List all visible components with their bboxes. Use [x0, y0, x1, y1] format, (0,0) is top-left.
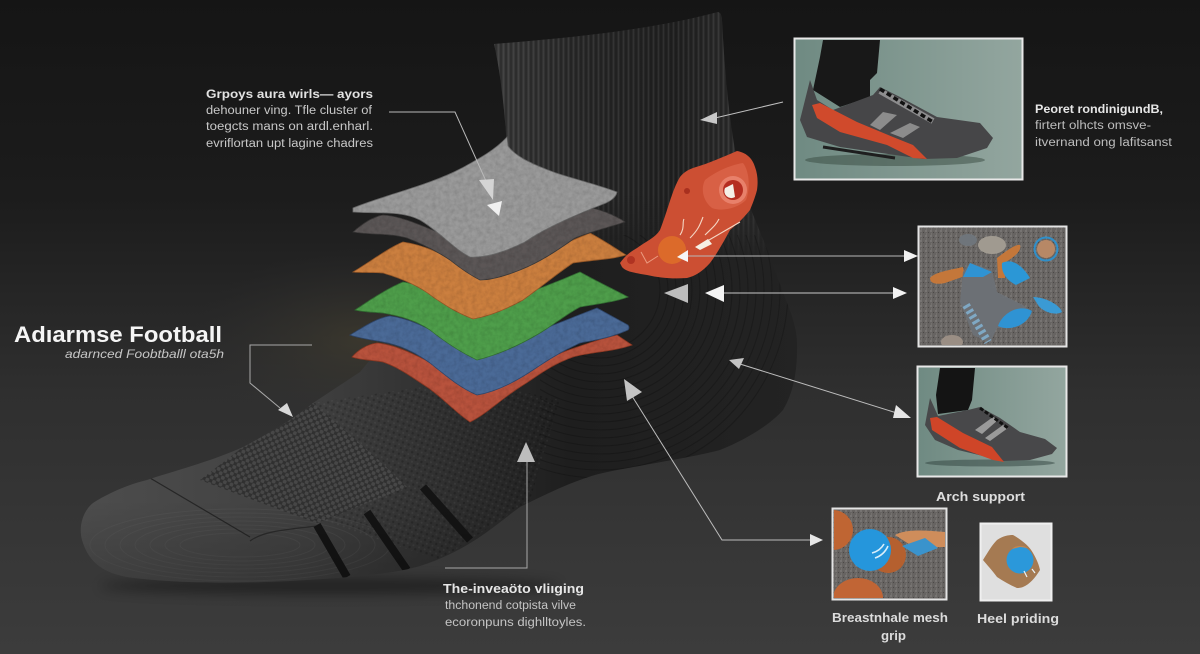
text: top-right callout: itvernand ong lafitsanst	[1035, 137, 1173, 149]
label: breathable mesh grip	[832, 611, 948, 643]
text: bottom callout: The-inveaöto vliıging	[443, 582, 584, 596]
layer: dark gray	[353, 208, 625, 280]
text: top-right callout: Peoret rondinigundB,	[1035, 102, 1163, 116]
layer: blue	[350, 308, 629, 395]
text: top-left callout: Grpoys aura wirls— ayors	[206, 87, 373, 101]
text: main title: Adıarmse Football	[14, 322, 222, 347]
text: top-right callout: firtert olhcts omsve-	[1035, 120, 1151, 132]
text: bottom callout	[443, 582, 586, 629]
sock body	[70, 0, 797, 590]
label: breathable mesh grip: Breastnhale mesh	[832, 611, 948, 625]
text: top-left callout: toegcts mans on ardl.enharl.	[206, 121, 373, 133]
layered sock materials stack	[350, 137, 632, 422]
label: breathable mesh grip: grip	[881, 629, 906, 643]
panel: blue ball grip	[832, 508, 948, 600]
arrow: shoe panel to sock shaft	[700, 102, 783, 124]
text: top-left callout: dehouner ving. Tfle cluster of	[206, 105, 373, 117]
text: main title	[14, 322, 224, 361]
panel: heel padding	[980, 524, 1052, 600]
layer: red base	[352, 335, 632, 422]
text: bottom callout: thchonend cotpista vilve	[445, 600, 576, 612]
red heel cup	[620, 151, 758, 278]
text: main title: adarnced Foobtballl ota5h	[65, 347, 224, 361]
arrow: title to forefoot	[250, 345, 312, 417]
panel: shoe side view	[918, 366, 1066, 476]
text: top-right callout	[1035, 102, 1173, 149]
text: top-left callout	[206, 87, 373, 150]
layer: gray top	[353, 137, 617, 257]
arrow: ankle double head	[664, 284, 907, 303]
arrow: arch to mesh panel	[624, 379, 823, 546]
label: heel padding: Heel priding	[977, 612, 1059, 626]
arrow: top-left label to fabric layers	[389, 112, 502, 216]
arrow: ankle to arch panel	[729, 358, 911, 418]
panel: gravel with blue and orange shoe	[918, 226, 1066, 349]
text: top-left callout: evriflortan upt lagine chadres	[206, 138, 373, 150]
arrow: heel cup to grip panel	[677, 250, 918, 262]
text: bottom callout: ecoronpuns dighlltoyles.	[445, 617, 586, 629]
layer: orange	[353, 233, 626, 319]
layer: green	[355, 272, 628, 360]
label: arch support: Arch support	[936, 490, 1026, 504]
panel: shoe on sage background	[794, 38, 1022, 180]
arrow: bottom text to sole	[445, 442, 535, 568]
